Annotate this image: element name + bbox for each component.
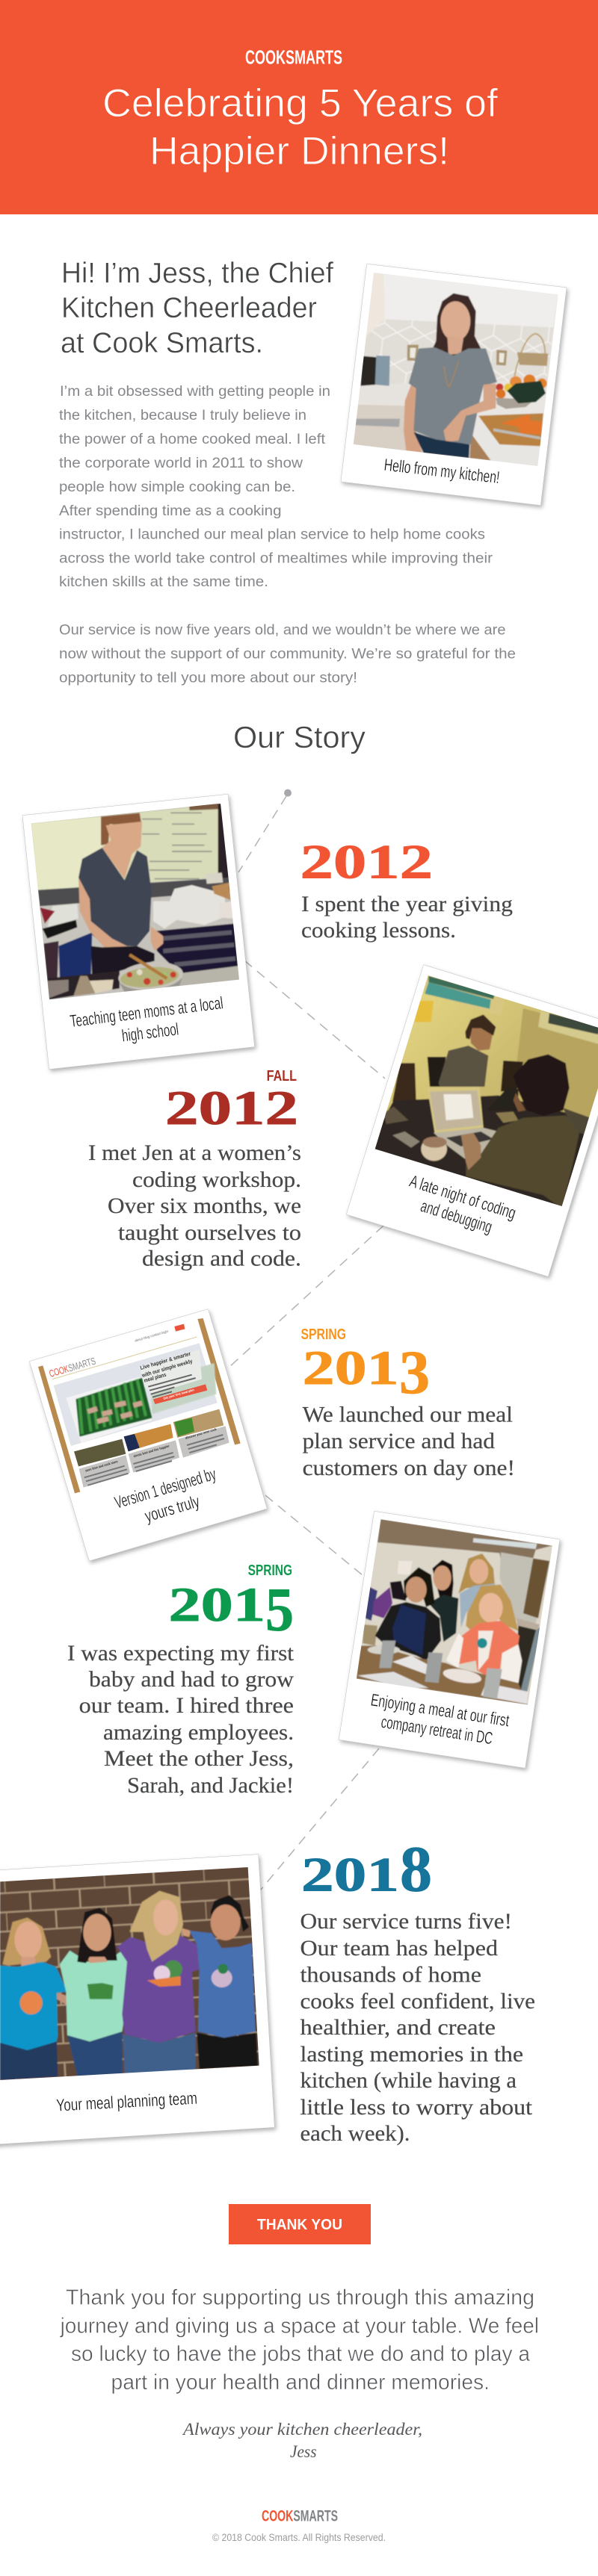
description: kitchen (while having a [300, 2069, 517, 2093]
feature cards: stress less and live happier [133, 1444, 170, 1458]
description: lasting memories in the [300, 2043, 523, 2067]
milestone: spring 2015 [67, 1562, 295, 1798]
description [88, 1141, 301, 1271]
sign-off: Always your kitchen cheerleader, [182, 2420, 422, 2439]
milestone: fall 2012 [88, 1068, 301, 1271]
season label: SPRING [300, 1326, 346, 1343]
description: Over six months, we [108, 1194, 301, 1218]
website screenshot: COOKSMARTS [48, 1356, 97, 1379]
caption: yours truly [143, 1491, 202, 1526]
intro body text: the corporate world in 2011 to show [59, 455, 303, 471]
caption [369, 1689, 511, 1748]
caption: A late night of coding [407, 1171, 519, 1223]
year: 5 [265, 1575, 294, 1644]
caption: Version 1 designed by [112, 1464, 218, 1512]
caption [407, 1171, 519, 1237]
season label: FALL [267, 1068, 297, 1084]
website screenshot: about blog contact login [135, 1329, 169, 1343]
description: thousands of home [300, 1964, 481, 1987]
description [301, 893, 513, 943]
photo: four women at dinner table [354, 1516, 555, 1708]
description: design and code. [142, 1247, 301, 1271]
description: Our team has helped [300, 1937, 498, 1961]
photo: Jess leaning on kitchen counter [351, 271, 561, 468]
description: healthier, and create [300, 2016, 496, 2040]
description [303, 1403, 515, 1480]
caption: Teaching teen moms at a local [69, 993, 224, 1031]
thank you button [229, 2204, 371, 2244]
intro body text [59, 383, 516, 686]
thank you message: Thank you for supporting us through this amazing [66, 2286, 534, 2310]
polaroid: teaching teen moms [22, 794, 255, 1070]
caption: Your meal planning team [56, 2088, 197, 2115]
caption: high school [120, 1019, 179, 1046]
caption [69, 993, 224, 1046]
caption: company retreat in DC [380, 1712, 494, 1748]
timeline connector: fall 2012 [244, 960, 385, 1078]
description: amazing employees. [103, 1721, 294, 1745]
description: taught ourselves to [118, 1221, 301, 1245]
description: cooks feel confident, live [300, 1990, 535, 2014]
timeline connector: spring 2015 [265, 1495, 363, 1575]
description: little less to worry about [300, 2096, 533, 2120]
description [300, 1910, 535, 2146]
thank you message: part in your health and dinner memories. [111, 2371, 490, 2395]
thank you button: THANK YOU [257, 2217, 342, 2233]
intro body text: the power of a home cooked meal. I left [59, 431, 326, 447]
milestone: 2018 [300, 1833, 535, 2146]
polaroid: meal planning team [0, 1855, 274, 2145]
intro body text: opportunity to tell you more about our story! [59, 669, 357, 686]
website screenshot [38, 1318, 241, 1493]
photo: woman cooking in classroom [28, 801, 241, 1001]
caption: Hello from my kitchen! [383, 455, 501, 487]
title: Happier Dinners! [150, 129, 449, 173]
timeline dot [284, 789, 292, 797]
intro heading: at Cook Smarts. [61, 327, 263, 359]
website screenshot: with our simple weekly [141, 1357, 194, 1379]
intro body text: instructor, I launched our meal plan service to help home cooks [59, 526, 485, 542]
footer logo: COOKSMARTS [262, 2507, 338, 2524]
website screenshot: meal plans [143, 1371, 167, 1384]
description: each week). [300, 2122, 410, 2146]
year: 201 [303, 1341, 399, 1395]
year: 201 [301, 1849, 399, 1902]
year [303, 1338, 430, 1406]
photo: four team members in matching shirts [0, 1865, 262, 2082]
year [169, 1575, 294, 1644]
milestone: spring 2013 [300, 1326, 515, 1480]
year: 2012 [165, 1081, 298, 1135]
polaroid: Jess in kitchen [341, 264, 567, 506]
description: I spent the year giving [301, 893, 513, 916]
description: customers on day one! [303, 1456, 515, 1480]
intro body text: across the world take control of mealtimes while improving their [59, 550, 493, 567]
feature cards [74, 1409, 229, 1488]
year: 8 [400, 1833, 432, 1905]
intro body text: now without the support of our community. We’re so grateful for the [59, 646, 516, 662]
description: our team. I hired three [79, 1694, 294, 1718]
polaroid: first website version [29, 1309, 267, 1561]
thank you message [60, 2286, 539, 2395]
caption: Enjoying a meal at our first [369, 1689, 511, 1731]
thank you message: journey and giving us a space at your table. We feel [60, 2315, 539, 2338]
year: 201 [169, 1578, 265, 1632]
intro body text: Our service is now five years old, and we wouldn’t be where we are [59, 621, 505, 638]
description: I was expecting my first [67, 1642, 295, 1666]
description: Meet the other Jess, [104, 1747, 294, 1771]
year: 3 [399, 1338, 430, 1406]
polaroid: company retreat meal [339, 1511, 560, 1768]
caption [112, 1464, 218, 1526]
section heading: Our Story: Our Story [233, 720, 366, 754]
timeline connector: spring 2013 [229, 1226, 383, 1368]
description: cooking lessons. [301, 919, 456, 943]
photo: two women coding at a table [369, 971, 598, 1210]
intro heading: Hi! I’m Jess, the Chief [61, 257, 333, 290]
description: I met Jen at a women’s [88, 1141, 301, 1165]
title: Celebrating 5 Years of [102, 81, 498, 125]
description: We launched our meal [303, 1403, 513, 1427]
title [102, 81, 498, 173]
timeline connector: 2018 [261, 1748, 379, 1890]
description: plan service and had [303, 1430, 495, 1453]
feature cards: discover your inner cook [185, 1427, 218, 1440]
intro heading [61, 257, 333, 359]
intro body text: kitchen skills at the same time. [59, 574, 268, 590]
polaroid: late night coding [346, 965, 598, 1276]
intro body text: people how simple cooking can be. [59, 479, 295, 495]
website screenshot: Live happier & smarter [139, 1350, 191, 1371]
description [67, 1642, 295, 1798]
website screenshot: Get your first meal plan [163, 1388, 195, 1400]
intro body text: After spending time as a cooking [59, 503, 281, 519]
intro heading: Kitchen Cheerleader [61, 292, 317, 324]
description: coding workshop. [132, 1168, 301, 1192]
description: baby and had to grow [89, 1668, 295, 1692]
copyright: © 2018 Cook Smarts. All Rights Reserved. [212, 2532, 386, 2543]
header banner [0, 0, 598, 214]
feature cards: save time and cook more [85, 1459, 118, 1473]
logo: Cook Smarts: COOKSMARTS [245, 46, 342, 69]
caption: and debugging [419, 1196, 495, 1237]
year: 2012 [300, 836, 433, 890]
timeline connector: 2012 start [238, 796, 286, 872]
season label: SPRING [248, 1562, 292, 1579]
description: Our service turns five! [300, 1910, 512, 1934]
description: Sarah, and Jackie! [127, 1774, 294, 1798]
thank you message: so lucky to have the jobs that we do and to play a [71, 2342, 531, 2366]
sign-off: Jess [290, 2442, 317, 2461]
year [301, 1833, 432, 1905]
intro body text: I’m a bit obsessed with getting people in [60, 383, 330, 400]
sign-off [182, 2420, 422, 2461]
milestone: 2012 [300, 836, 513, 943]
intro body text: the kitchen, because I truly believe in [59, 407, 306, 423]
